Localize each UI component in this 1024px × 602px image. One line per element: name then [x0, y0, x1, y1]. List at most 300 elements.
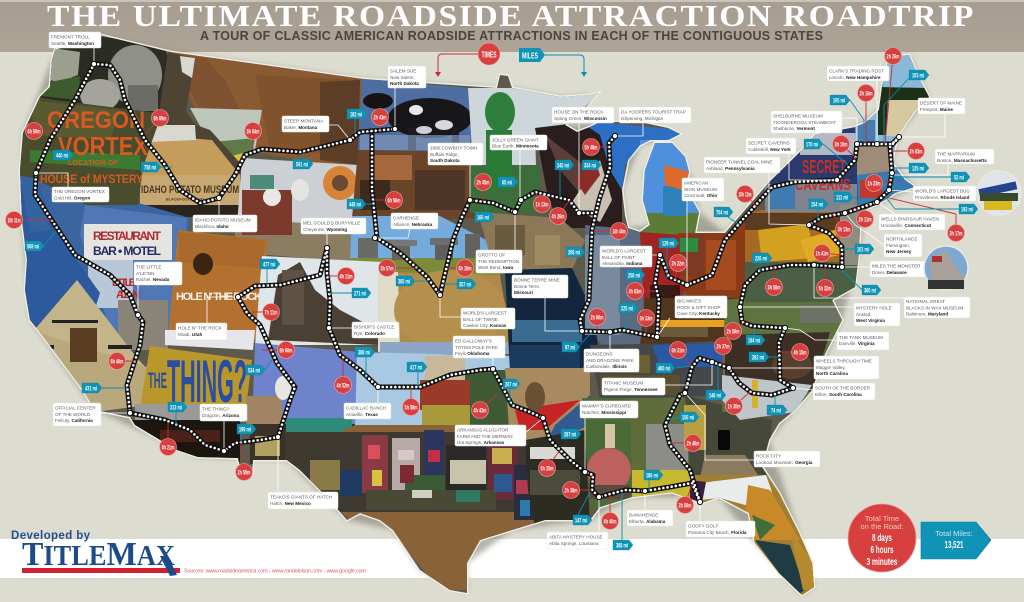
mileage tags: 282 mi	[752, 354, 764, 362]
label: Arkansas Alligator Farm: ARKANSAS ALLIGATOR	[457, 428, 509, 432]
text: Little A'Le'Inn sign: LITTLE	[112, 277, 136, 289]
label: Fremont Troll: FREMONT TROLL	[51, 34, 90, 40]
label: Mammy's Cupboard	[580, 401, 638, 418]
panel: South Dakota 1880 Cowboy Town	[352, 150, 482, 220]
label: World's Largest Ball of Paint	[600, 246, 652, 267]
travel time markers: 4h 26m	[552, 214, 565, 220]
label: Goofy Golf	[686, 521, 755, 537]
mileage tags: 568 mi	[27, 244, 39, 250]
label: Jolly Green Giant	[490, 135, 547, 150]
label: American Sign Museum	[682, 178, 724, 201]
mileage tags: 74 mi	[771, 408, 781, 414]
label: Arkansas Alligator Farm: Hot Springs, Arkansas	[457, 440, 505, 445]
travel time markers: 2h 46m	[686, 440, 700, 448]
panel: Kansas ball of twine	[378, 270, 512, 354]
label: Northlandz: New Jersey	[886, 249, 912, 254]
mileage tags: 417 mi	[410, 364, 422, 372]
travel time markers: 3h 10m	[834, 142, 848, 148]
mileage tags: 388 mi	[616, 542, 628, 550]
label: Grotto of the Redemption: GROTTO OF	[478, 252, 505, 258]
label: Wells Dinosaur Haven: Uncasville, Connecticut	[881, 223, 932, 228]
label: Rock City: Lookout Mountain, Georgia	[756, 460, 813, 465]
travel time markers: 2h 43m	[374, 114, 387, 122]
label: Wells Dinosaur Haven: WELLS DINOSAUR HAVEN	[881, 216, 939, 222]
label: Little A'Le'Inn: THE LITTLE	[136, 264, 162, 270]
travel time markers: 6h 31m	[672, 348, 685, 354]
label: Arkansas Alligator Farm: FARM AND THE MERMAN	[457, 434, 513, 439]
panel: Montana steer	[165, 50, 365, 170]
total time badge: on the Road:	[861, 522, 903, 531]
label: Wheels Through Time: Maggie Valley,	[816, 365, 845, 370]
label: Bonne Terre Mine: Missouri	[514, 290, 533, 295]
travel time markers: 3h 58m	[768, 284, 781, 292]
travel time markers: 6h 40m	[110, 358, 124, 366]
label: The Tank Museum	[837, 332, 889, 350]
text: Oregon Vortex sign: VORTEX	[58, 131, 149, 161]
mileage tags: 400 mi	[658, 366, 670, 372]
label: The Mapparium: THE MAPPARIUM	[937, 152, 975, 156]
mileage tags: 385 mi	[398, 278, 410, 286]
total time badge: Total Time	[865, 514, 899, 523]
panel: Georgia Rock City	[684, 395, 772, 500]
panel: Texas Cadillac Ranch	[285, 425, 540, 590]
travel time markers: 2h 50m	[238, 470, 251, 476]
legend: miles	[519, 48, 587, 77]
mileage tags: 170 mi	[806, 142, 818, 148]
label: 1880 Cowboy Town: Buffalo Ridge,	[430, 152, 459, 157]
label: Oregon Vortex: Gold Hill, Oregon	[54, 195, 90, 200]
label: Oregon Vortex: THE OREGON VORTEX	[54, 189, 105, 194]
text: Idaho Potato Museum sign	[141, 184, 239, 202]
panel: Oklahoma totem pole	[355, 352, 510, 425]
label: Desert of Maine	[918, 98, 965, 114]
label: Salem Sue: SALEM SUE	[390, 68, 416, 74]
label: Abita Mystery House: Abita Springs, Louisiana	[549, 541, 599, 546]
label: Little A'Le'Inn	[134, 262, 182, 285]
label: Miles the Monster	[870, 261, 925, 277]
label: National Great Blacks in Wax Museum: Baltimore, Maryland	[906, 312, 948, 317]
mileage tags: 245 mi	[557, 162, 569, 170]
label: Teako's Giants of Hatch: TEAKO'S GIANTS OF HATCH	[270, 494, 332, 500]
travel time markers: 6h 59m	[28, 128, 41, 136]
panel: New York Secret Caverns	[765, 127, 860, 212]
mileage tags: 448 mi	[349, 202, 361, 208]
label: Hole N" the Rock: HOLE N" THE ROCK	[178, 326, 223, 330]
label: Salem Sue: North Dakota	[390, 81, 419, 86]
label: Mel Gould's Buryville	[301, 218, 366, 234]
label: Desert of Maine: DESERT OF MAINE	[920, 100, 962, 106]
text: Oregon Vortex sign: HOUSE of MYSTERY	[40, 172, 143, 186]
travel time markers: 2h 16m	[860, 90, 873, 98]
label: Big Mike's Rock and Gift Shop: ROCK & GIFT SHOP	[677, 305, 721, 310]
panel: Nevada restaurant sign	[38, 180, 190, 350]
label: Shelburne Museum	[771, 111, 842, 133]
label: Grotto of the Redemption: THE REDEMPTION	[478, 259, 519, 264]
label: Fremont Troll: Seattle, Washington	[51, 41, 94, 46]
label: Hole N" the Rock: Moab, Utah	[178, 332, 202, 337]
label: Northlandz	[884, 234, 922, 257]
total miles badge: 13,521	[944, 539, 964, 551]
label: Mystery Hole: Ansted,	[856, 312, 872, 317]
mileage tags: 758 mi	[144, 164, 156, 172]
panel: Nebraska Carhenge	[350, 216, 500, 278]
text: Oregon Vortex sign: OREGON	[47, 107, 145, 134]
label: World's Largest Ball of Paint: Alexandria, Indiana	[602, 261, 643, 266]
label: World's Largest Ball of Twine	[461, 308, 515, 329]
label: Goofy Golf: Panama City Beach, Florida	[688, 530, 747, 535]
travel time markers: 3h 17m	[950, 230, 963, 238]
label: Big Mike's Rock and Gift Shop: Cave City, Kentucky	[677, 311, 720, 316]
panel: California blue coast	[20, 172, 100, 336]
travel time markers: 4h 43m	[474, 408, 487, 414]
label: Northlandz: Flemington,	[886, 243, 910, 248]
travel time markers: 2h 37m	[716, 344, 730, 350]
label: Official Center of the World	[53, 403, 101, 426]
panel: Idaho potato museum	[140, 52, 242, 217]
text: Oregon Vortex sign: LOCATION OF	[68, 160, 119, 167]
label: Jolly Green Giant: JOLLY GREEN GIANT	[492, 137, 539, 142]
white footer band	[0, 539, 1024, 578]
label: Bamahenge: BAMAHENGE	[629, 512, 658, 518]
label: Carhenge: CARHENGE	[393, 216, 419, 220]
label: House on the Rock	[552, 107, 614, 123]
label: Miles the Monster: Dover, Delaware	[872, 270, 907, 275]
label: The Thing?: Dragoon, Arizona	[202, 413, 239, 418]
label: Bamahenge: Elberta, Alabama	[629, 519, 666, 524]
travel time markers: 4h 11m	[340, 274, 353, 280]
label: Shelburne Museum: TICONDEROGA STEAMBOAT	[773, 120, 836, 125]
label: Titanic Museum: Pigeon Forge, Tennessee	[604, 387, 658, 392]
label: 1880 Cowboy Town: South Dakota	[430, 158, 460, 163]
label: World's Largest Bug: Providence, Rhode Island	[915, 195, 970, 200]
label: American Sign Museum: AMERICAN	[684, 180, 708, 186]
label: Cadillac Ranch	[344, 403, 391, 419]
label: House on the Rock: HOUSE ON THE ROCK	[554, 110, 604, 114]
label: Titanic Museum: TITANIC MUSEUM	[604, 380, 643, 386]
text: Secret Caverns sign: CAVERNS	[795, 177, 851, 194]
travel time markers: 1h 30m	[728, 404, 741, 410]
travel time markers: 4h 52m	[336, 382, 350, 390]
mileage tags: 440 mi	[56, 152, 68, 160]
travel time markers: 4h 03m	[628, 288, 642, 296]
panel: Washington, Fremont Troll	[40, 37, 170, 112]
label: Carhenge: Alliance, Nebraska	[393, 222, 433, 227]
travel time markers: 5h 32m	[818, 286, 832, 292]
label: 1880 Cowboy Town: 1880 COWBOY TOWN	[430, 146, 477, 150]
text: restaurant bar motel sign: RESTAURANT	[93, 229, 162, 243]
travel time markers: 6h 56m	[388, 198, 401, 204]
travel time markers: 5h 25m	[540, 466, 554, 472]
attraction labels	[49, 32, 994, 549]
mileage tags: 199 mi	[239, 426, 251, 434]
mileage tags	[25, 70, 978, 550]
label: American Sign Museum: Cincinnati, Ohio	[684, 193, 717, 198]
panel: New England	[840, 50, 932, 265]
label: World's Largest Ball of Twine: WORLD'S LARGEST	[463, 310, 507, 316]
travel time markers: 10h 13m	[738, 192, 752, 198]
travel time markers: 1h 41m	[816, 250, 829, 258]
label: Carhenge	[391, 213, 438, 229]
label connector lines	[36, 48, 948, 532]
label: Jolly Green Giant: Blue Earth, Minnesota	[492, 144, 539, 149]
panel: Colorado Bishop's Castle	[255, 256, 382, 345]
label: Mammy's Cupboard: MAMMY'S CUPBOARD	[582, 404, 632, 408]
developer logo: Developed by	[11, 530, 91, 542]
label: The Tank Museum: Danville, Virginia	[839, 341, 875, 346]
route stop nodes	[33, 61, 902, 505]
label: World's Largest Ball of Twine: Cawker City, Kansas	[463, 323, 507, 328]
mileage tags: 357 mi	[459, 282, 471, 288]
travel time markers: 2h 38m	[564, 488, 578, 494]
road trip route	[35, 64, 899, 502]
mileage tags: 105 mi	[833, 98, 845, 104]
label: Clark's Trading Post: Lincoln, New Hampshire	[829, 75, 881, 80]
mileage tags: 186 mi	[646, 472, 658, 480]
label: Bamahenge	[627, 510, 673, 526]
total time badge: 6 hours	[870, 545, 894, 556]
label: Secret Caverns	[746, 138, 796, 154]
label: Desert of Maine: Freeport, Maine	[920, 107, 953, 112]
panel: New Mexico Giants of Hatch	[246, 343, 360, 464]
label: Pioneer Tunnel Coal Mine: Ashland, Pennsylvania	[706, 166, 755, 171]
legend: miles: MILES	[522, 52, 538, 60]
label: Idaho Potato Museum: Blackfoot, Idaho	[195, 224, 229, 229]
travel time markers: 5h 04m	[246, 128, 260, 136]
label: Mel Gould's Buryville: MEL GOULD'S BURYVILLE	[303, 220, 360, 226]
travel time markers: 4h 15m	[794, 350, 807, 356]
mileage tags: 97 mi	[565, 344, 575, 352]
text: Little A'Le'Inn sign: A'LE'INN	[116, 289, 140, 301]
panel: Michigan blue lakes and peninsulas	[589, 123, 699, 235]
mileage tags: 125 mi	[912, 166, 924, 172]
label: Grotto of the Redemption: West Bend, Iowa	[478, 265, 514, 270]
label: World's Largest Ball of Paint: WORLD'S LARGEST	[602, 248, 646, 254]
label: Ed Galloway's Totem Pole Park: TOTEM POLE PARK	[455, 345, 499, 350]
label: Bishop's Castle: Rye, Colorado	[354, 331, 385, 336]
travel time markers: 2h 26m	[886, 54, 900, 60]
label: Oregon Vortex	[52, 187, 109, 202]
panel: Arizona The Thing	[130, 346, 252, 462]
label: Mystery Hole: MYSTERY HOLE	[856, 306, 892, 310]
mileage tags: 184 mi	[748, 338, 760, 344]
label: Bonne Terre Mine: BONNE TERRE MINE	[514, 278, 560, 282]
text: Secret Caverns sign: SECRET	[802, 157, 846, 177]
mileage tags: 271 mi	[354, 290, 366, 298]
label: Bonne Terre Mine	[512, 275, 568, 298]
label: Dungeons and Dragons Park: DUNGEONS	[586, 352, 613, 356]
travel time markers: 1h 23m	[868, 180, 881, 188]
label: Salem Sue: New Salem,	[390, 75, 415, 80]
panel: Alabama Bamahenge	[630, 398, 702, 503]
label: Da Yoopers Tourist Trap: DA YOOPERS TOURIST TRAP	[621, 110, 686, 114]
panel: Mississippi Mammy's Cupboard	[582, 398, 632, 510]
mileage tags: 166 mi	[477, 214, 489, 222]
travel time markers: 10h 44m	[612, 228, 626, 236]
travel time markers: 2h 56m	[726, 328, 740, 336]
mileage tags: 146 mi	[709, 392, 721, 400]
label: World's Largest Bug: WORLD'S LARGEST BUG	[915, 188, 970, 194]
label: Arkansas Alligator Farm	[455, 425, 526, 446]
label: Official Center of the World: Felicity, California	[55, 418, 93, 423]
label: Secret Caverns: Cobleskill, New York	[748, 147, 791, 152]
label: National Great Blacks in Wax Museum: NATIONAL GREAT	[906, 299, 945, 304]
travel time markers: 2h 22m	[672, 260, 685, 268]
label: World's Largest Ball of Paint: BALL OF PAINT	[602, 255, 635, 260]
label: The Thing?	[200, 404, 247, 421]
mileage tags: 388 mi	[358, 350, 370, 356]
label: Official Center of the World: OF THE WORLD	[55, 412, 91, 417]
label: Little A'Le'Inn: A'LE'INN	[136, 271, 154, 276]
label: World's Largest Ball of Twine: BALL OF TWINE	[463, 317, 498, 322]
photo circle: World's Largest Bug	[977, 171, 1021, 215]
panel: Wyoming Mel Gould's Buryville	[235, 158, 358, 262]
label: Cadillac Ranch: CADILLAC RANCH	[346, 406, 386, 410]
header band	[0, 0, 1024, 52]
travel time markers: 2h 50m	[678, 502, 692, 510]
panel: Kentucky Big Mike's	[640, 298, 745, 345]
text: Idaho Potato Museum sign: BLACKFOOT, IDAHO	[166, 198, 204, 202]
label: Grotto of the Redemption	[476, 250, 522, 273]
travel time markers	[6, 48, 964, 530]
panel: Louisiana Abita Mystery House	[525, 430, 590, 528]
label: National Great Blacks in Wax Museum: BLACKS IN WAX MUSEUM	[906, 305, 963, 310]
panel: Arkansas Alligator Farm	[505, 368, 590, 445]
label: Da Yoopers Tourist Trap	[619, 107, 691, 123]
label: Bonne Terre Mine: Bonne Terre,	[514, 284, 540, 289]
text: Secret Caverns sign	[795, 157, 851, 194]
travel time markers: 7h 11m	[264, 310, 278, 316]
label: Salem Sue	[388, 66, 426, 88]
mileage tags: 704 mi	[716, 210, 728, 216]
mileage tags: 147 mi	[575, 518, 587, 524]
panel: Florida Goofy Golf	[690, 475, 820, 600]
subtitle: A TOUR OF CLASSIC AMERICAN ROADSIDE ATTRACTIONS IN EACH OF THE CONTIGUOUS STATES	[200, 29, 823, 43]
label: Big Mike's Rock and Gift Shop	[675, 296, 727, 318]
label: Rock City: ROCK CITY	[756, 454, 781, 458]
label: Mystery Hole	[854, 303, 900, 326]
label: Goofy Golf: GOOFY GOLF	[688, 524, 718, 528]
total time badge: 3 minutes	[866, 557, 898, 568]
label: Rock City	[754, 451, 820, 467]
mileage tags: 287 mi	[564, 432, 576, 438]
label: Little A'Le'Inn: Rachel, Nevada	[136, 277, 170, 282]
travel time markers: 5h 57m	[380, 266, 394, 272]
label: World's Largest Bug	[913, 186, 976, 201]
panel: Utah Hole N' the Rock	[165, 230, 268, 350]
label: Fremont Troll	[49, 32, 101, 48]
panel: Tennessee Titanic	[590, 342, 724, 398]
travel time markers: 10h 31m	[8, 218, 21, 224]
panel: North Dakota Salem Sue	[358, 79, 475, 152]
label: Pioneer Tunnel Coal Mine: PIONEER TUNNEL COAL MINE	[706, 160, 772, 164]
label: Clark's Trading Post	[827, 66, 889, 81]
label: Mammy's Cupboard: Natchez, Mississippi	[582, 410, 626, 415]
text: The Thing sign	[148, 360, 246, 402]
label: Teako's Giants of Hatch	[268, 492, 338, 509]
travel time markers: 8h 09m	[154, 116, 167, 122]
legend: times: TIMES	[482, 50, 497, 60]
label: Steer Montana	[282, 116, 329, 132]
mileage tags: 208 mi	[568, 250, 580, 256]
photo collage map of the United States: THING?	[167, 348, 247, 415]
label: Steer Montana: STEER MONTANA	[284, 118, 324, 124]
mileage tags: 477 mi	[263, 262, 275, 268]
travel time markers: 2h 03m	[910, 148, 923, 156]
travel time markers: 1h 13m	[536, 202, 549, 208]
label: Mel Gould's Buryville: Cheyenne, Wyoming	[303, 227, 347, 232]
label: Ed Galloway's Totem Pole Park	[453, 336, 505, 358]
developer logo: TITLEMAX	[22, 536, 175, 573]
total time badge	[848, 504, 916, 572]
mileage tags: 226 mi	[755, 256, 767, 262]
label: Clark's Trading Post: CLARK'S TRADING POST	[829, 68, 884, 74]
label: South of the Border	[813, 383, 875, 400]
panel: Oregon Vortex	[15, 95, 158, 205]
mileage tags: 258 mi	[628, 272, 640, 280]
mileage tags: 182 mi	[350, 112, 362, 118]
label: Bishop's Castle	[352, 322, 399, 338]
label: South of the Border: SOUTH OF THE BORDER	[815, 386, 871, 390]
panel: Illinois and Indiana ball of paint	[585, 225, 685, 345]
label: Shelburne Museum: Shelburne, Vermont	[773, 126, 815, 131]
mileage tags: 313 mi	[170, 404, 182, 412]
mileage tags: 360 mi	[864, 288, 876, 294]
text: Oregon Vortex sign	[40, 107, 149, 186]
mileage tags: 52 mi	[954, 174, 964, 182]
travel time markers: 3h 13m	[838, 226, 851, 234]
mileage tags: 591 mi	[296, 162, 308, 168]
total time badge: 8 days	[872, 533, 892, 544]
label: Idaho Potato Museum	[193, 215, 257, 232]
mileage tags: 129 mi	[662, 240, 674, 248]
label: Hole N" the Rock	[176, 323, 227, 340]
label: Abita Mystery House: ABITA MYSTERY HOUSE	[549, 534, 603, 540]
label: Titanic Museum	[602, 378, 665, 395]
label: House on the Rock: Spring Green, Wisconsin	[554, 116, 607, 121]
label: Bishop's Castle: BISHOP'S CASTLE	[354, 324, 394, 330]
mileage tags: 534 mi	[248, 368, 260, 374]
panel: Ohio American Sign Museum	[678, 215, 745, 300]
label: 1880 Cowboy Town	[428, 143, 483, 165]
mileage tags: 267 mi	[505, 382, 517, 388]
travel time markers: 2h 45m	[476, 180, 490, 186]
mileage tags: 334 mi	[584, 162, 596, 170]
label: The Tank Museum: THE TANK MUSEUM	[839, 335, 883, 340]
text: Hole N' the Rock: HOLE N' THE ROCK	[176, 291, 262, 303]
text: Idaho Potato Museum sign: IDAHO POTATO MUSEUM	[141, 184, 239, 196]
label: Secret Caverns: SECRET CAVERNS	[748, 140, 790, 146]
text: restaurant bar motel sign: BAR • MOTEL	[93, 244, 161, 258]
label: Dungeons and Dragons Park	[584, 349, 639, 372]
label: Wheels Through Time: WHEELS THROUGH TIME	[816, 358, 872, 364]
label: Abita Mystery House	[547, 532, 608, 549]
label: Miles the Monster: MILES THE MONSTER	[872, 264, 921, 268]
panel: Iowa Grotto of the Redemption	[478, 212, 585, 274]
label: South of the Border: Dillon, South Carolina	[815, 392, 862, 397]
sources: Sources: www.roadsideamerica.com - www.randalolson.com - www.google.com	[184, 568, 366, 574]
label: Mystery Hole: West Virginia	[856, 318, 885, 323]
text: Little A'Le'Inn sign	[112, 278, 140, 298]
label: Ed Galloway's Totem Pole Park: ED GALLOWAY'S	[455, 338, 492, 344]
label: American Sign Museum: SIGN MUSEUM	[684, 187, 717, 192]
total miles badge	[921, 522, 991, 559]
label: Northlandz: NORTHLANDZ	[886, 236, 918, 242]
mileage tags: 156 mi	[682, 414, 694, 422]
label: Wells Dinosaur Haven	[879, 214, 945, 230]
panel: California pyramid	[30, 280, 150, 412]
travel time markers: 5h 58m	[404, 404, 418, 412]
label: Dungeons and Dragons Park: AND DRAGONS PARK	[586, 358, 635, 363]
